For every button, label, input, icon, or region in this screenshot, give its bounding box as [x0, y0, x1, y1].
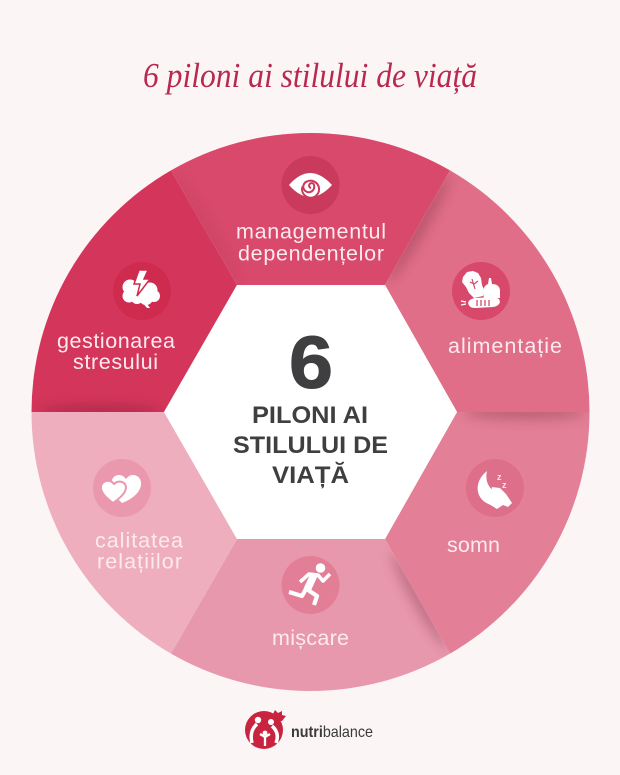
title: 6 piloni ai stilului de viață — [143, 56, 477, 95]
icon: family in pomegranate — [245, 710, 286, 749]
center text: PILONI AI — [252, 402, 368, 429]
panel: calitatea relațiilor — [32, 412, 237, 654]
number 6: 6 — [289, 321, 333, 404]
icon: moon and blanket: z — [502, 480, 507, 490]
icon: moon and blanket — [466, 459, 524, 517]
label: alimentație: alimentație — [448, 334, 562, 358]
label: gestionarea stresului: gestionarea — [57, 329, 175, 353]
label: calitatea relațiilor — [95, 528, 183, 574]
center text: VIAȚĂ — [272, 461, 349, 489]
icon: brain with bolt — [113, 262, 171, 320]
panel: managementul dependențelor — [169, 133, 450, 287]
icon: vegetables — [452, 262, 510, 320]
pillar wheel — [32, 133, 590, 691]
label: mișcare: mișcare — [272, 626, 349, 650]
icon: moon and blanket: z — [497, 472, 502, 482]
label: gestionarea stresului: stresului — [73, 350, 158, 374]
panel: somn — [385, 405, 590, 654]
label: somn: somn — [447, 533, 500, 557]
logo: nutribalance — [245, 710, 373, 749]
panel: alimentație — [381, 170, 590, 412]
icon: runner — [282, 556, 340, 614]
label: managementul dependențelor: dependențelor — [238, 242, 384, 266]
panel: mișcare — [171, 539, 454, 691]
wordmark: nutribalance — [291, 724, 373, 741]
center text: STILULUI DE — [233, 432, 388, 459]
center text — [233, 402, 388, 489]
label: managementul dependențelor — [236, 220, 386, 266]
label: managementul dependențelor: managementul — [236, 220, 386, 244]
label: gestionarea stresului — [57, 329, 175, 374]
icon: two hearts — [93, 459, 151, 517]
icon: eye with spiral — [282, 156, 340, 214]
label: calitatea relațiilor: calitatea — [95, 528, 183, 552]
panel: center hexagon — [164, 285, 457, 539]
label: calitatea relațiilor: relațiilor — [97, 550, 182, 574]
panel: gestionarea stresului — [32, 170, 237, 419]
